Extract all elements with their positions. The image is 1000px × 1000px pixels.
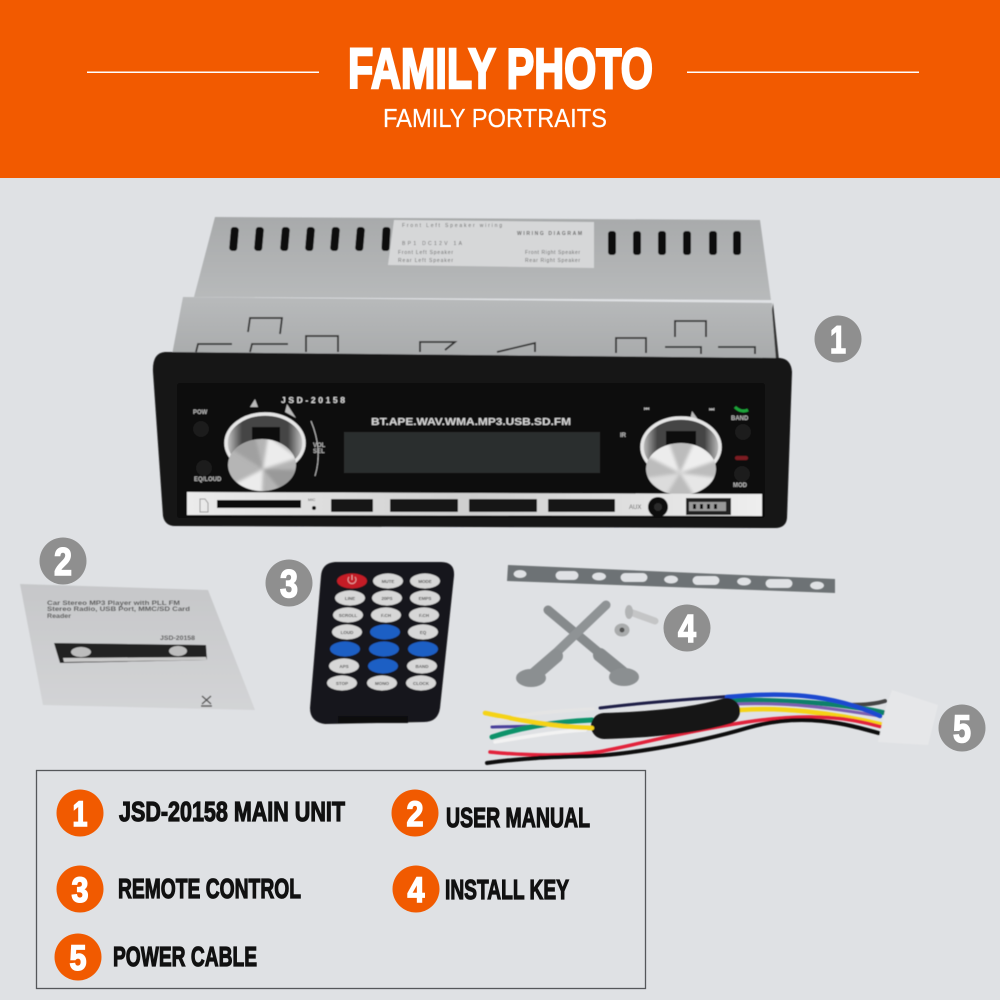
legend item 1: 1 (72, 795, 88, 834)
black front bezel (153, 352, 792, 528)
legend item 4 (392, 866, 569, 912)
user manual (20, 584, 255, 710)
install key: crossed brackets (516, 605, 639, 687)
legend item 2: USER MANUAL (446, 802, 590, 833)
wiring diagram label: Front Right Speaker (525, 250, 580, 256)
microphone (312, 506, 316, 510)
legend item 5: 5 (70, 939, 86, 978)
legend item 5: POWER CABLE (113, 941, 257, 972)
remote button captions: LOUD (341, 630, 354, 635)
remote button captions: LINE (345, 596, 355, 601)
remote button captions: SCROLL (339, 613, 358, 618)
control labels: SEL (313, 449, 325, 455)
silver control bar: MIC (308, 497, 315, 502)
control labels (193, 407, 749, 489)
manual product picture (54, 643, 207, 663)
legend item 1: JSD-20158 MAIN UNIT (119, 796, 345, 827)
small round buttons (193, 421, 751, 482)
badge 2: 2 (54, 541, 72, 584)
legend item 5 (54, 934, 257, 980)
title: FAMILY PHOTO (348, 37, 653, 101)
control labels: BAND (731, 416, 749, 422)
badge 4: 4 (678, 608, 696, 651)
install key: mounting strap (507, 565, 835, 593)
manual heading: Stereo Radio, USB Port, MMC/SD Card (47, 606, 190, 613)
rear chassis with vents (194, 217, 771, 300)
remote button captions: STOP (336, 681, 348, 686)
SD card icon (200, 499, 208, 512)
remote button captions: F.CH (419, 613, 429, 618)
remote button captions: MUTE (382, 579, 394, 584)
bar buttons (331, 499, 615, 512)
install key: bolt and nut (614, 605, 655, 636)
power cable (485, 690, 938, 763)
remote button captions: BAND (416, 664, 429, 669)
badge 3: 3 (280, 563, 298, 606)
manual heading: Reader (47, 613, 72, 620)
control labels: MOD (733, 483, 748, 489)
legend item 3: REMOTE CONTROL (118, 873, 301, 904)
badge 3 (266, 560, 312, 606)
badge 4 (664, 604, 710, 652)
legend item 4: INSTALL KEY (445, 874, 569, 905)
manual heading (47, 600, 195, 642)
badge 1 (814, 316, 862, 362)
remote control (310, 562, 454, 724)
heat-shrink sleeve (604, 711, 727, 726)
wiring diagram label (388, 220, 594, 268)
legend item 3: 3 (72, 871, 88, 910)
manual heading: Car Stereo MP3 Player with PLL FM (47, 600, 180, 607)
badge 2 (40, 538, 86, 584)
subtitle: FAMILY PORTRAITS (383, 103, 607, 133)
remote button captions: MODE (418, 579, 432, 584)
remote button captions: MONO (375, 681, 389, 686)
remote button captions: APS (339, 664, 349, 669)
format list: BT.APE.WAV.WMA.MP3.USB.SD.FM (371, 417, 571, 428)
display window (344, 432, 600, 473)
battery notch (338, 716, 408, 723)
front chassis section (171, 297, 779, 360)
legend item 3 (56, 866, 301, 912)
wiring diagram label: BP1 DC12V 1A (402, 241, 463, 247)
wiring diagram label: Rear Left Speaker (398, 258, 453, 264)
aux jack: AUX (629, 505, 641, 511)
faceplate (177, 383, 765, 518)
control labels: EQ/LOUD (194, 477, 222, 483)
left volume knob (225, 399, 304, 495)
power symbol (348, 575, 356, 584)
connector plug (878, 690, 938, 745)
control labels: VOL (313, 443, 326, 449)
card slot (217, 500, 301, 508)
product photo: main unit (153, 217, 792, 528)
silver control bar (187, 492, 762, 517)
model number: JSD-20158 (281, 395, 345, 405)
badge 5 (938, 704, 986, 752)
remote button captions: 20PS (381, 596, 393, 601)
badge 5: 5 (953, 708, 971, 751)
manual heading: JSD-20158 (160, 635, 195, 642)
control labels: POW (193, 410, 208, 416)
remote button captions: EQ (420, 630, 427, 635)
usb port (686, 498, 731, 515)
legend item 1 (56, 790, 345, 836)
wiring diagram label: WIRING DIAGRAM (517, 231, 582, 237)
legend item 4: 4 (408, 871, 425, 910)
wiring diagram label: Front Left Speaker wiring (402, 223, 502, 229)
remote button captions (336, 579, 432, 686)
wiring diagram label: Rear Right Speaker (525, 258, 580, 264)
phone icon (735, 407, 748, 411)
right tuning knob (642, 411, 720, 497)
remote buttons (327, 574, 440, 690)
control labels: IR (620, 433, 627, 439)
header banner (0, 0, 1000, 178)
remote button captions: EMPS (419, 596, 431, 601)
control labels: ⏭ (709, 407, 715, 413)
wiring diagram label: Front Left Speaker (398, 250, 453, 256)
recycling mark (201, 696, 212, 706)
legend item 2 (392, 790, 590, 836)
legend item 2: 2 (406, 795, 424, 834)
remote button captions: CLOCK (413, 681, 430, 686)
badge 1: 1 (830, 319, 846, 362)
legend panel (36, 770, 646, 988)
remote button captions: F.CH (381, 613, 391, 618)
control labels: ⏮ (644, 407, 650, 413)
